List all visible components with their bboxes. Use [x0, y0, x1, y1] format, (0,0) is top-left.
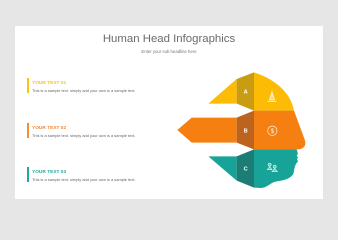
segment A: yellow — [208, 72, 294, 111]
heading 03: YOUR TEXT 03 — [32, 170, 66, 174]
text block 02 — [27, 123, 136, 138]
icon: people — [267, 163, 277, 172]
text block 01 — [27, 78, 136, 93]
body 02: This is a sample text. simply add your own is a sample text. — [32, 132, 136, 138]
label C: C — [244, 167, 248, 173]
icon: dollar coin: $ — [271, 128, 275, 135]
body 03: This is a sample text. simply add your own is a sample text. — [32, 176, 136, 182]
human head diagram — [177, 72, 306, 188]
heading 01: YOUR TEXT 01 — [32, 80, 66, 86]
heading 02: YOUR TEXT 02 — [32, 126, 66, 130]
segment C: teal — [208, 149, 298, 188]
subtitle: Enter your sub headline here — [141, 49, 197, 54]
icon: traffic cone — [267, 92, 277, 101]
text block 03 — [27, 167, 136, 182]
label A: A — [244, 90, 248, 96]
body 01: This is a sample text. simply add your own is a sample text. — [32, 88, 136, 92]
white card — [14, 26, 323, 199]
label B: B — [244, 128, 248, 134]
accent bar 01 — [27, 78, 29, 93]
accent bar 03 — [27, 167, 29, 182]
accent bar 02 — [27, 123, 29, 138]
segment B: orange — [177, 111, 305, 149]
title: Human Head Infographics — [103, 33, 235, 45]
